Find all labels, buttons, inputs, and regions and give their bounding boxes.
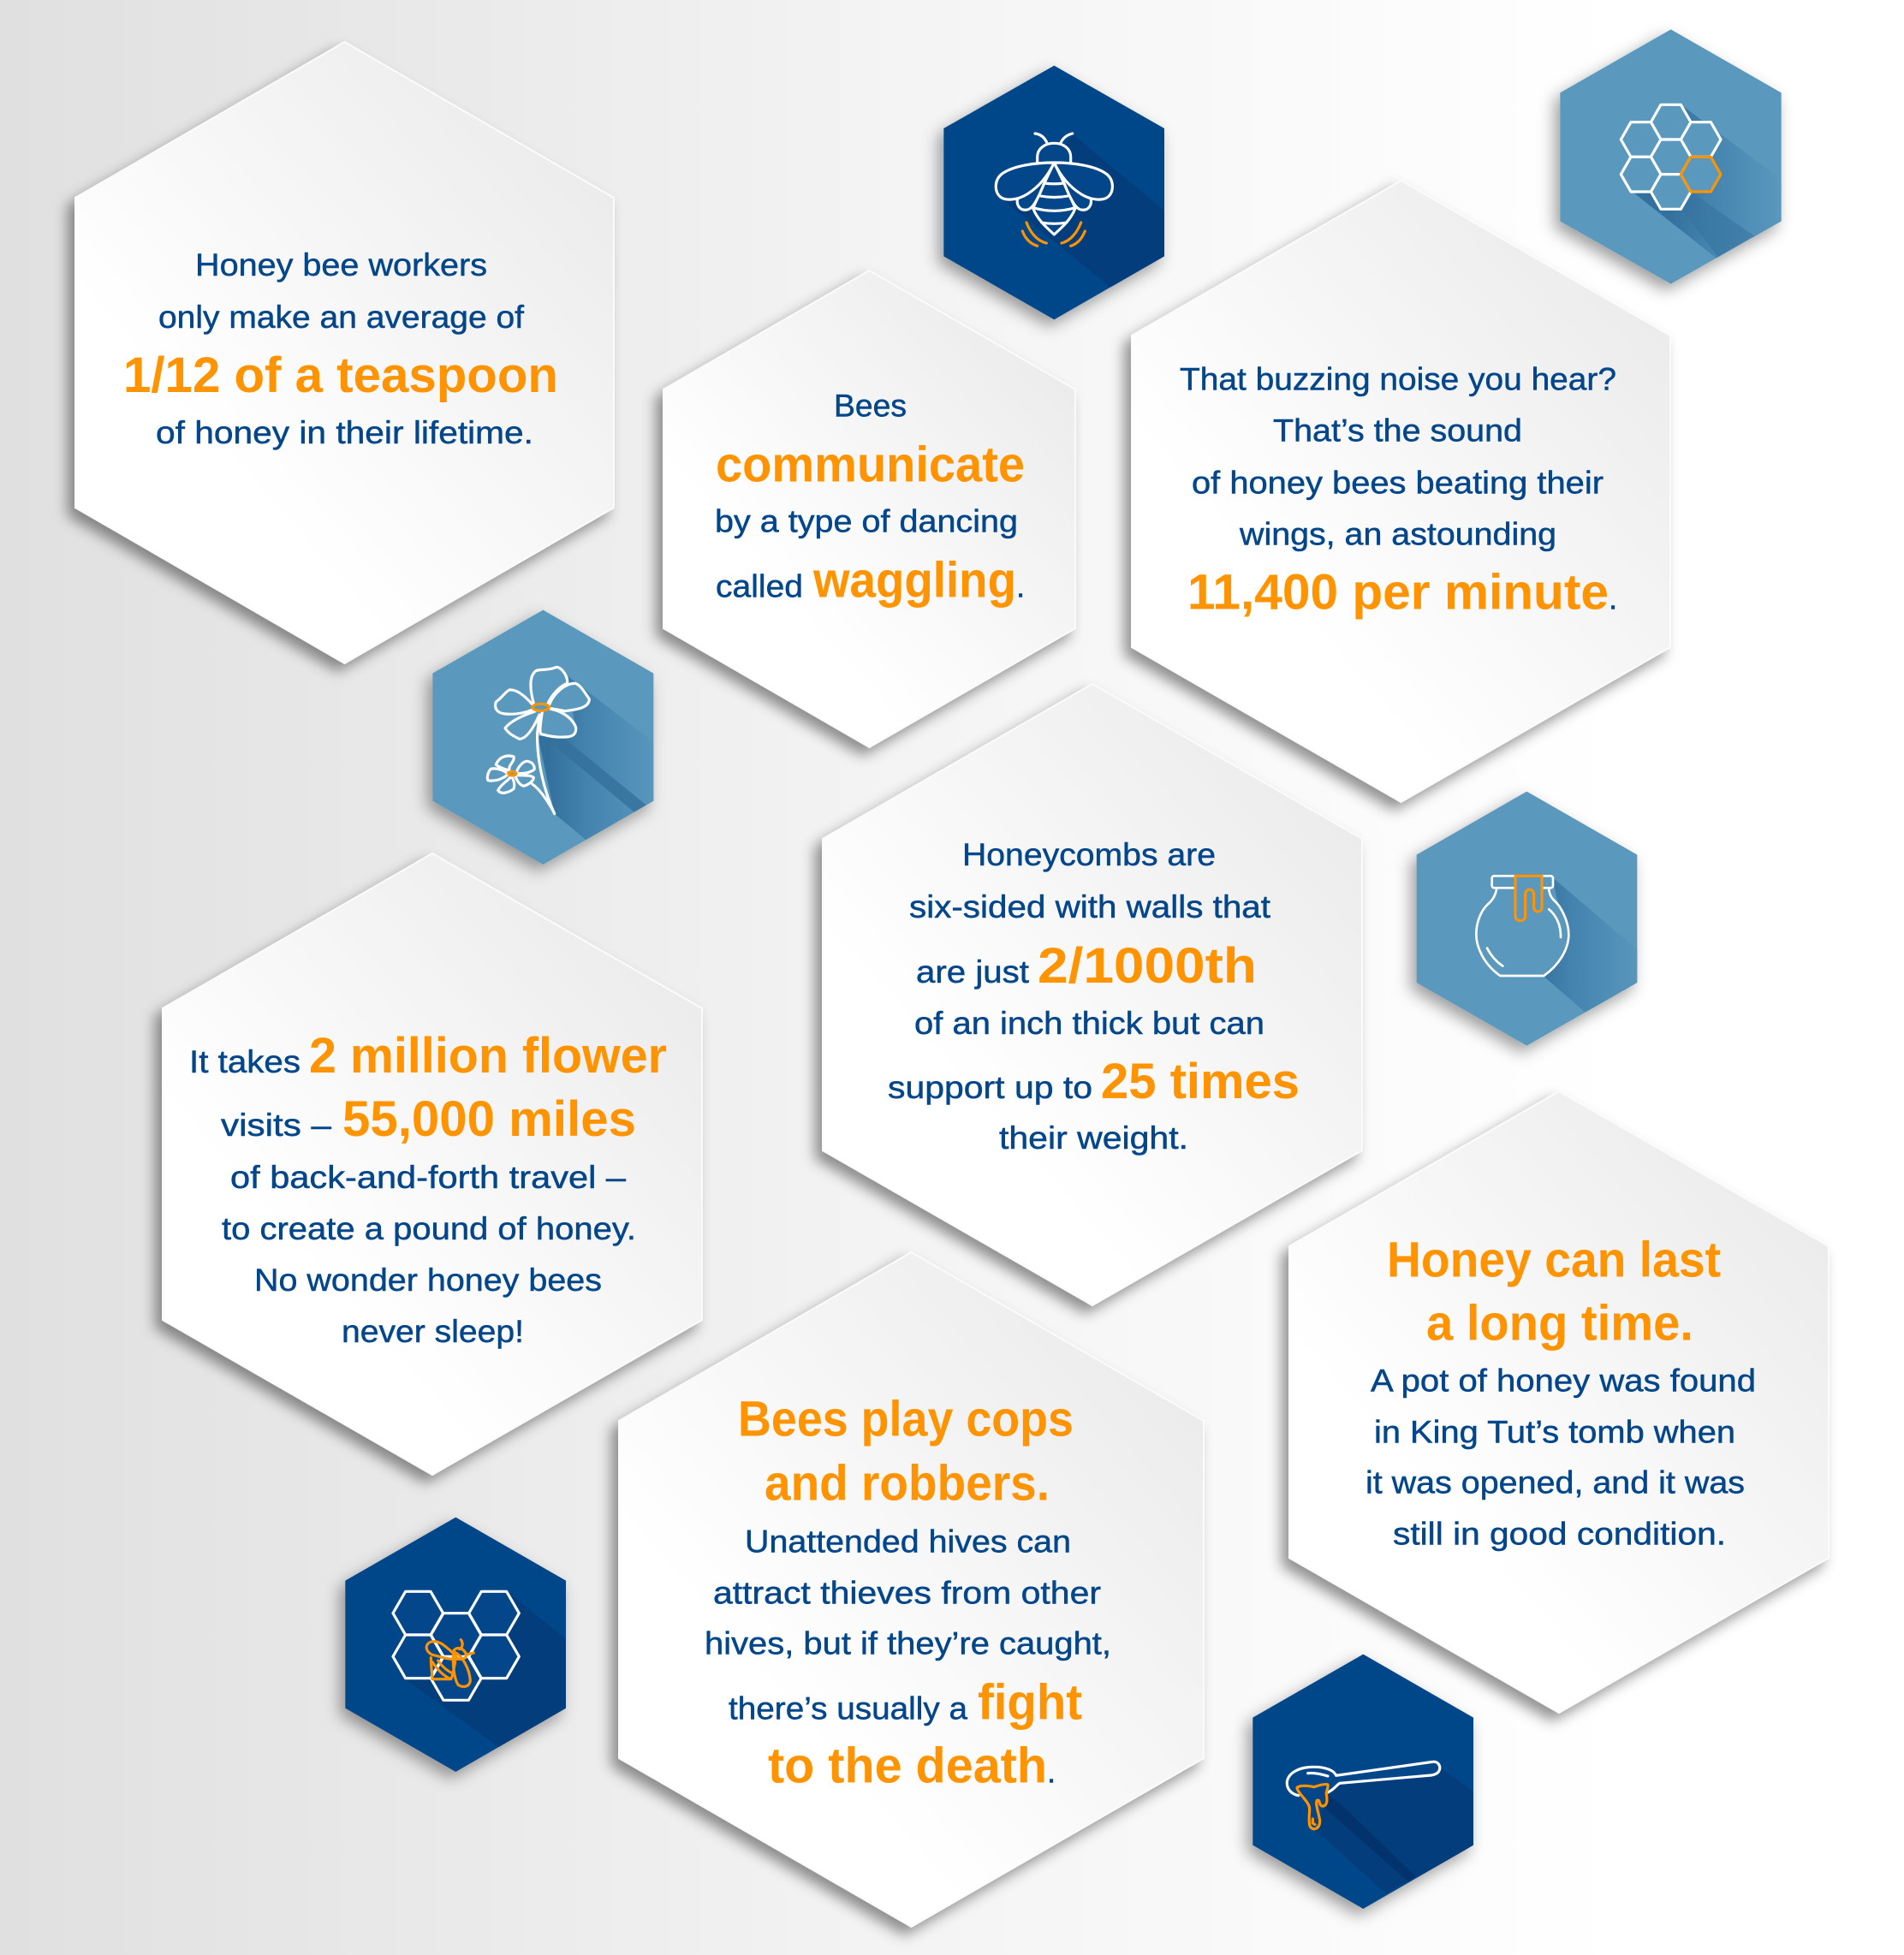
text: waggling fact: waggling [812,553,1016,608]
text: King Tut fact: still in good condition. [1393,1517,1726,1551]
text: King Tut fact: A pot of honey was found [1371,1363,1756,1399]
panel: cops and robbers [619,1252,1204,1927]
text: flower visits fact: never sleep! [342,1314,524,1349]
text: flower visits fact: visits – [221,1108,331,1143]
text: robber bees fact: Bees play cops [738,1392,1074,1447]
text: honeycomb fact: Honeycombs are [962,837,1216,872]
text: flower visits fact: 2 million flower [309,1028,667,1084]
text: robber bees fact: . [1047,1755,1056,1789]
text: honeycomb fact: are just [916,954,1030,989]
text: honeycomb fact: six-sided with walls that [909,889,1271,924]
text: King Tut fact [1366,1233,1756,1551]
text: waggling fact: by a type of dancing [715,503,1018,539]
text: honeycomb fact: their weight. [999,1120,1188,1156]
text: flower visits fact [189,1028,667,1349]
text: wing beat fact: 11,400 per minute [1187,565,1609,620]
icon: honey spoon [1252,1655,1475,1909]
icon: bee on honeycomb [345,1518,568,1772]
panel: bees communicate [663,270,1075,747]
text: King Tut fact: Honey can last [1387,1233,1721,1287]
text: robber bees fact: to the death [768,1738,1047,1794]
text: robber bees fact: fight [978,1674,1082,1731]
text: flower visits fact: No wonder honey bees [254,1263,602,1298]
panel: one twelfth of a teaspoon [75,42,614,663]
icon: honey jar [1417,792,1639,1046]
text: teaspoon fact: Honey bee workers [195,247,487,282]
text: waggling fact: called [716,568,803,604]
text: wing beat fact: That’s the sound [1273,413,1522,449]
text: robber bees fact: there’s usually a [729,1691,967,1726]
text: robber bees fact: attract thieves from other [713,1575,1101,1611]
text: teaspoon fact [123,247,558,450]
text: flower visits fact: to create a pound of honey. [222,1211,636,1246]
icon: honeycomb cells [1560,29,1783,284]
icon: flowers [432,610,655,865]
text: honeycomb fact: 2/1000th [1038,938,1257,994]
panel: flower visits [163,853,702,1475]
text: robber bees fact: and robbers. [765,1455,1050,1512]
text: teaspoon fact: of honey in their lifetime. [156,415,533,450]
text: waggling fact: . [1016,568,1025,604]
text: flower visits fact: 55,000 miles [342,1091,636,1147]
text: teaspoon fact: only make an average of [158,300,525,335]
text: honeycomb fact: 25 times [1101,1054,1300,1109]
text: wing beat fact: That buzzing noise you hear? [1180,361,1616,397]
text: King Tut fact: in King Tut’s tomb when [1374,1414,1735,1450]
panel: honeycombs [823,684,1362,1305]
text: waggling fact: communicate [716,437,1025,493]
text: wing beat fact: . [1609,580,1617,616]
text: wing beat fact [1180,361,1617,620]
text: flower visits fact: It takes [189,1044,300,1079]
panel: buzzing noise [1132,181,1670,802]
text: robber bees fact [705,1392,1111,1794]
panel: honey lasts [1289,1091,1829,1713]
icon: bee [943,66,1166,319]
text: honeycomb fact: support up to [888,1070,1092,1105]
text: wing beat fact: wings, an astounding [1239,517,1556,551]
text: King Tut fact: a long time. [1426,1296,1693,1351]
text: honeycomb fact: of an inch thick but can [914,1006,1264,1041]
text: teaspoon fact: 1/12 of a teaspoon [123,348,558,403]
text: flower visits fact: of back-and-forth travel – [230,1160,626,1195]
text: waggling fact [715,389,1025,608]
text: wing beat fact: of honey bees beating their [1192,466,1604,500]
text: King Tut fact: it was opened, and it was [1366,1465,1745,1500]
text: robber bees fact: hives, but if they’re caught, [705,1626,1111,1661]
text: honeycomb fact [888,837,1300,1156]
text: robber bees fact: Unattended hives can [745,1524,1071,1560]
text: waggling fact: Bees [834,389,907,423]
